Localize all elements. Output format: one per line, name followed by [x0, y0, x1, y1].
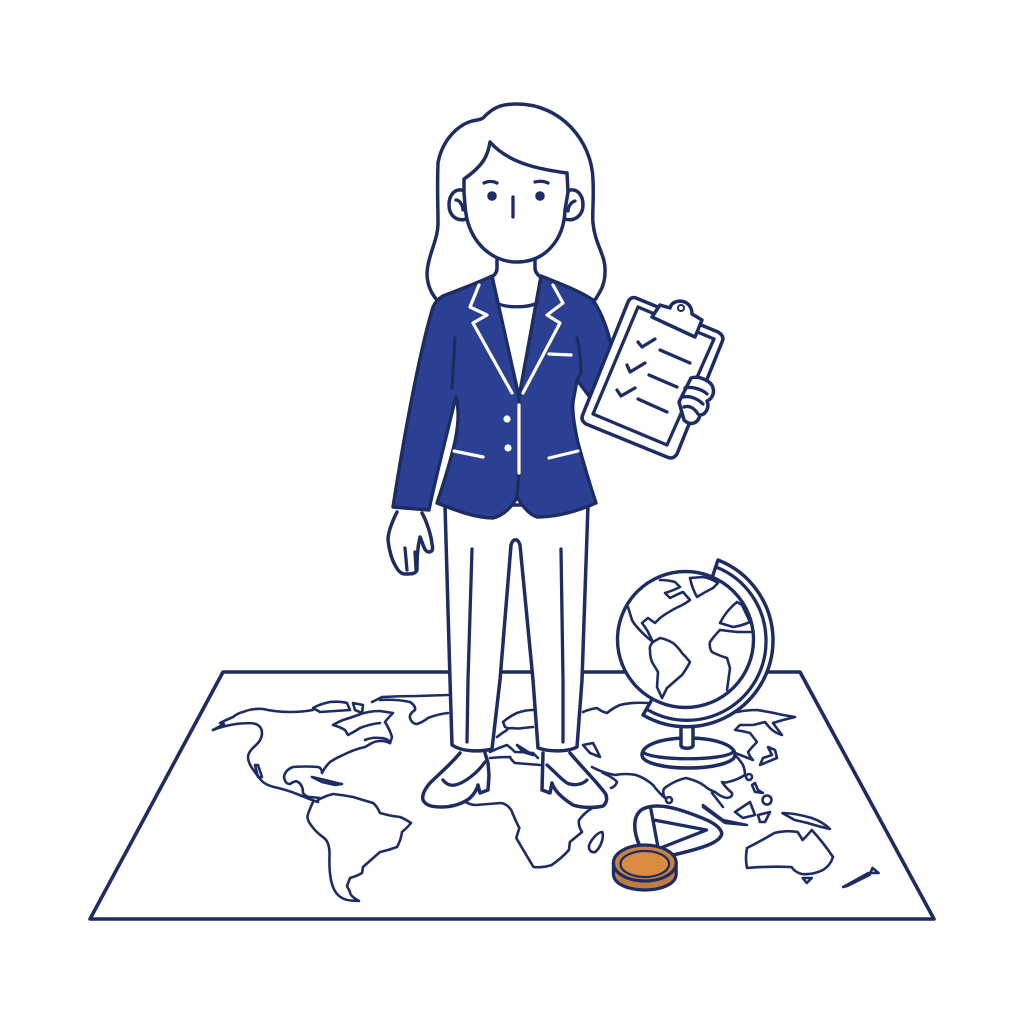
map: new zealand [843, 868, 879, 887]
hand holding clipboard [679, 377, 713, 423]
clipboard clip [652, 301, 702, 337]
map: madagascar [589, 832, 603, 852]
checklist [617, 339, 690, 412]
left shoe [423, 753, 489, 807]
medal coin [613, 845, 676, 890]
globe continents [628, 577, 753, 698]
globe sphere [618, 572, 754, 708]
medal [613, 806, 722, 890]
clipboard inner sheet [593, 307, 714, 445]
map: australia [746, 830, 833, 874]
neckline [497, 303, 537, 307]
map border [90, 672, 934, 919]
map: south east asia islands [666, 774, 772, 825]
woman figure [388, 104, 723, 807]
placket [517, 405, 521, 473]
map: south america [307, 794, 411, 901]
right shoe [542, 753, 607, 807]
globe stand base [642, 724, 735, 768]
buttons [503, 415, 512, 452]
map: tasmania [803, 878, 812, 883]
map: south hemisphere landmasses [466, 802, 879, 887]
clipboard board [582, 298, 723, 458]
panel: world map sheet [90, 672, 934, 919]
neck [490, 255, 543, 312]
globe [618, 560, 773, 768]
clipboard [582, 298, 723, 458]
map: africa [466, 802, 592, 867]
hanging hand [388, 512, 433, 574]
map: new guinea [782, 813, 830, 829]
chest pocket [549, 354, 571, 355]
lapels [470, 285, 563, 393]
medal ribbon [635, 806, 722, 855]
trousers [445, 505, 588, 751]
hair [427, 104, 605, 300]
hip pockets [454, 451, 578, 458]
map: europe and asia [490, 703, 795, 798]
ears [449, 190, 583, 220]
blazer seams [452, 338, 581, 497]
shirt [494, 280, 540, 400]
globe meridian arc [643, 560, 773, 727]
blazer [393, 276, 614, 518]
face [464, 142, 568, 262]
map: north america [213, 695, 448, 802]
facial features [484, 181, 548, 217]
jacket shell [393, 276, 614, 518]
